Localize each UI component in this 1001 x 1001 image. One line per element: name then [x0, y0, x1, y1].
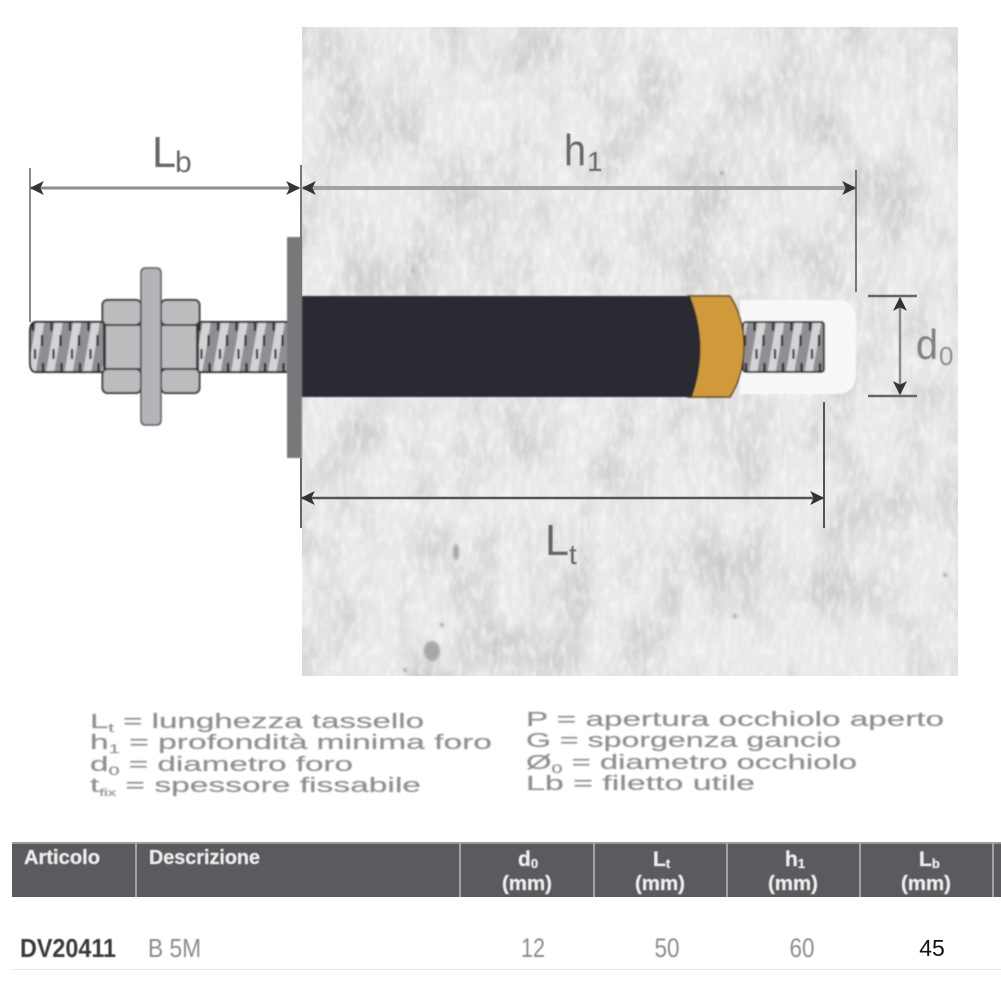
legend item tfix: = spessore fissabile [116, 775, 421, 797]
table header: (mm) [768, 873, 818, 895]
legend item G: G = sporgenza gancio [526, 730, 841, 752]
left hex nut [102, 300, 141, 393]
legend item d0: 0 [108, 764, 120, 778]
legend item tfix: t [90, 775, 96, 797]
dimension: Lb [30, 128, 299, 322]
legend item d0: d [90, 754, 101, 776]
table row: DV20411 [20, 933, 116, 963]
dimension: h1 [301, 126, 856, 296]
legend item diameter: Ø [526, 752, 542, 774]
legend item Lb: Lb = filetto utile [526, 773, 755, 795]
legend item Lt: t [108, 721, 115, 735]
table header: Articolo [24, 847, 100, 869]
black chemical sleeve [302, 296, 701, 397]
panel: concrete background [302, 27, 958, 676]
dimension: d0: 0 [939, 341, 953, 371]
table [12, 842, 1001, 970]
table header: t [666, 856, 671, 871]
table header: 1 [798, 856, 805, 871]
dimension: h1: h [564, 126, 586, 175]
dimension: Lt: L [545, 516, 569, 565]
threaded end inside hole [743, 322, 824, 372]
base plate [287, 237, 302, 458]
table header: Descrizione [149, 847, 260, 869]
dimension: Lt: t [569, 539, 577, 570]
dimension: Lt [301, 402, 824, 570]
legend item Lt: L [90, 711, 101, 733]
legend item diameter: = diametro occhiolo [562, 752, 857, 774]
table header: b [932, 856, 940, 871]
table row: 60 [790, 933, 814, 963]
table header: (mm) [901, 873, 951, 895]
table header: 0 [531, 856, 538, 871]
drilled hole [740, 300, 856, 394]
right hex nut [161, 300, 200, 393]
legend: left column [90, 711, 492, 799]
dimension: h1: 1 [587, 146, 603, 177]
table header: (mm) [635, 873, 685, 895]
table row: B 5M [148, 933, 201, 963]
threaded rod middle [198, 322, 288, 372]
threaded rod left [30, 322, 104, 372]
value 45: 45 [919, 935, 945, 961]
table row: 50 [654, 933, 680, 963]
table header [12, 842, 1001, 897]
legend item h1: 1 [109, 742, 120, 756]
table header: L [919, 848, 932, 871]
table header: (mm) [502, 873, 552, 895]
diagram: bolt assembly [30, 237, 856, 458]
dimension: Lb: b [175, 146, 192, 179]
legend item tfix: fix [99, 788, 116, 799]
legend item d0: = diametro foro [120, 754, 353, 776]
dimension: d0 [868, 296, 953, 396]
legend item h1: h [90, 732, 101, 754]
dimension: Lb: L [152, 128, 176, 177]
table row [20, 933, 814, 963]
centre washer [141, 268, 161, 425]
dimension: d0: d [916, 321, 938, 368]
gold cap [688, 296, 744, 397]
table row: 12 [521, 933, 545, 963]
legend item diameter: 0 [552, 762, 563, 776]
legend item h1: = profondità minima foro [120, 732, 492, 754]
legend: right column [526, 709, 944, 795]
legend item Lt: = lunghezza tassello [114, 711, 424, 733]
legend item P: P = apertura occhiolo aperto [526, 709, 944, 731]
table header: h [785, 848, 798, 871]
table header: L [653, 848, 666, 871]
table header: d [518, 848, 531, 871]
